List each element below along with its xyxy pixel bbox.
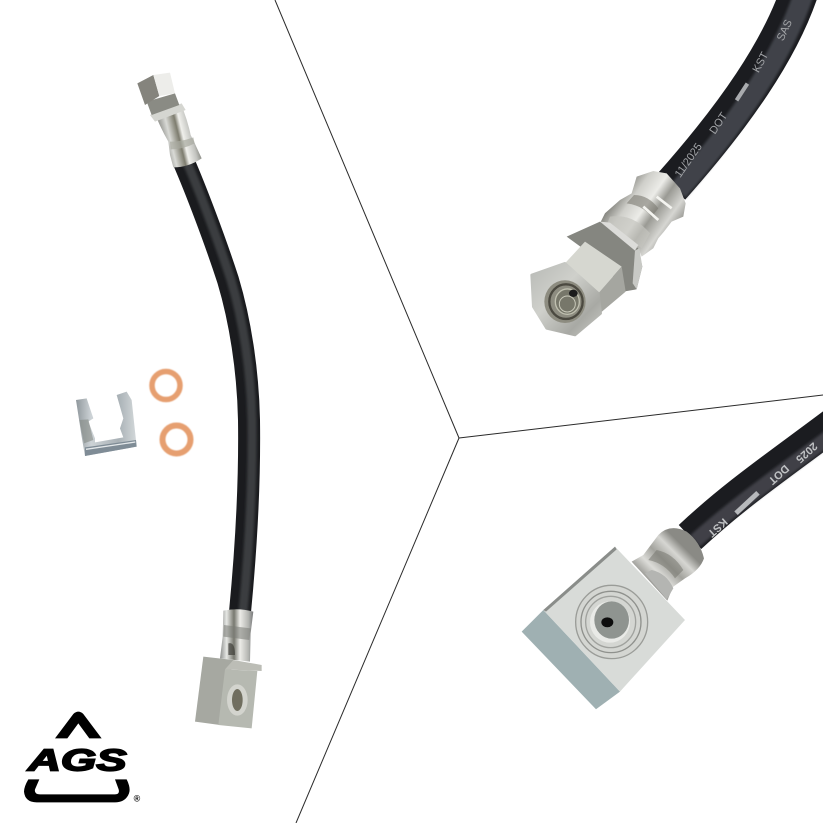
detail: upper fitting bbox=[532, 0, 805, 335]
retaining clip bbox=[76, 392, 137, 456]
detail: lower fitting bbox=[522, 423, 823, 709]
hose print upper: 11/2025 bbox=[673, 141, 705, 180]
top fitting bbox=[137, 73, 202, 167]
AGS logo bbox=[24, 712, 141, 804]
threaded bore upper bbox=[544, 280, 586, 323]
registered mark: ® bbox=[134, 794, 141, 804]
washer lower bbox=[162, 426, 190, 454]
hose print upper bbox=[673, 18, 795, 180]
hose print lower: 2025 bbox=[793, 440, 819, 465]
bottom fitting bbox=[195, 609, 262, 728]
washer upper bbox=[152, 372, 180, 400]
hose print upper: DOT bbox=[707, 110, 730, 137]
copper washers bbox=[152, 372, 190, 454]
hose body bbox=[183, 160, 252, 612]
crimp ferrule upper bbox=[600, 171, 686, 257]
hose close-up lower bbox=[690, 423, 823, 541]
hex collar upper bbox=[567, 222, 642, 292]
hex nut upper bbox=[532, 242, 626, 335]
hose print lower: DOT bbox=[765, 462, 791, 487]
mounting block bbox=[522, 547, 685, 709]
block bore bbox=[576, 585, 648, 659]
hose close-up upper bbox=[671, 0, 805, 191]
logo bottom bracket bbox=[24, 779, 130, 802]
hose print lower: KST bbox=[705, 515, 730, 539]
logo wordmark: AGS bbox=[27, 744, 127, 778]
main brake hose bbox=[137, 73, 262, 728]
crimp ferrule lower bbox=[632, 528, 704, 601]
divider lines bbox=[275, 0, 823, 823]
hose print upper: KST bbox=[751, 50, 771, 75]
logo top chevron bbox=[55, 712, 102, 738]
hose print upper: SAS bbox=[775, 18, 795, 43]
hose print lower bbox=[705, 440, 819, 539]
